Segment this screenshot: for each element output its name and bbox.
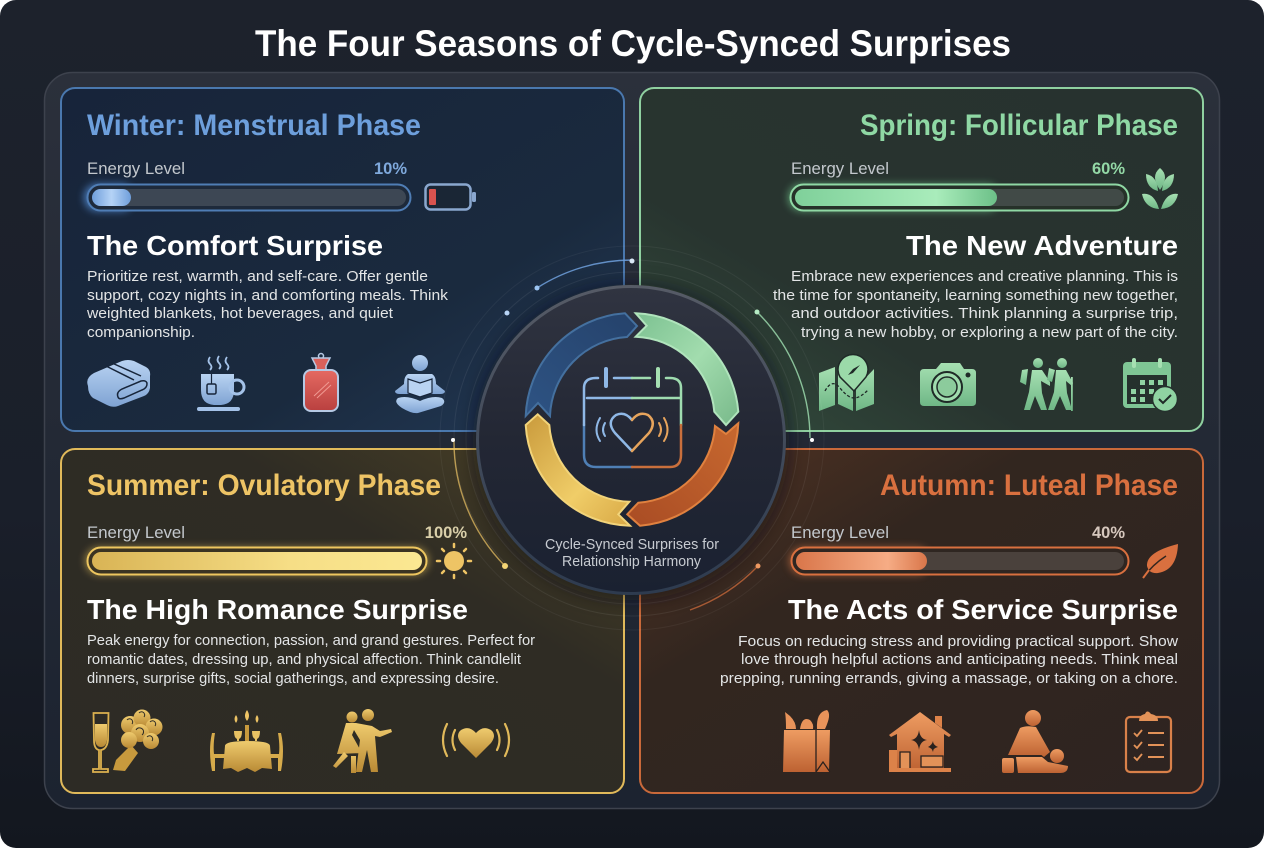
body text: spring: trying a new hobby, or exploring a new part of the city. [801, 324, 1178, 341]
body text: winter: companionship. [87, 324, 195, 341]
energy value: summer: 100% [425, 524, 467, 542]
body text: winter: weighted blankets, hot beverages, and quiet [86, 305, 394, 322]
icon: heart with waves [443, 724, 509, 758]
icon: map with compass [819, 355, 874, 411]
arrow: autumn segment [627, 423, 738, 526]
arrow: winter segment [526, 313, 637, 416]
body text: spring: Embrace new experiences and creative planning. This is [791, 268, 1178, 285]
energy bar: autumn [789, 547, 1128, 575]
subheading: summer: The High Romance Surprise [87, 594, 468, 625]
body text: summer [87, 632, 535, 687]
caption: Cycle-Synced Surprises for [545, 537, 719, 553]
caption [545, 537, 719, 570]
icon: sprout [1142, 168, 1178, 209]
energy bar: winter [84, 184, 410, 211]
body text: winter [86, 268, 448, 341]
title: The Four Seasons of Cycle-Synced Surprises [255, 23, 1011, 64]
icon: camera [920, 363, 976, 406]
energy label: winter: Energy Level [87, 159, 185, 178]
panel: winter [61, 88, 624, 431]
icon: clipboard checklist [1126, 712, 1171, 772]
icon: champagne and bouquet [93, 710, 162, 772]
icon: calendar with check [1123, 358, 1178, 412]
icon: hikers [1020, 358, 1073, 411]
subheading: autumn: The Acts of Service Surprise [788, 594, 1178, 625]
connector arcs and glowing dots [440, 246, 824, 630]
body text: autumn: Focus on reducing stress and providing practical support. Show [738, 633, 1178, 650]
heading: summer: Summer: Ovulatory Phase [87, 469, 441, 502]
heading: winter: Winter: Menstrual Phase [87, 109, 421, 142]
caption: Relationship Harmony [562, 554, 702, 570]
icon: grocery bag [783, 710, 830, 772]
body text: spring [773, 268, 1178, 341]
panel: autumn [640, 449, 1203, 793]
arrow: summer segment [526, 414, 630, 526]
icon: tea cup [197, 356, 244, 411]
body text: summer: dinners, surprise gifts, social gatherings, and expressing desire. [87, 670, 499, 687]
body text: spring: the time for spontaneity, learning something new together, [773, 287, 1178, 304]
icon: battery [426, 184, 476, 210]
panel: spring [640, 88, 1203, 431]
icon: clean house [889, 712, 951, 772]
energy label: spring: Energy Level [791, 159, 889, 178]
energy value: winter: 10% [374, 160, 407, 178]
body text: spring: and outdoor activities. Think planning a surprise trip, [791, 305, 1178, 322]
icon: calendar with heart [584, 369, 681, 467]
icon: massage [1002, 710, 1068, 773]
arrow: spring segment [636, 313, 738, 425]
icon: meditating reader [395, 355, 445, 413]
energy value: spring: 60% [1092, 160, 1125, 178]
energy label: summer: Energy Level [87, 523, 185, 542]
icon: dancing couple [333, 709, 392, 773]
heading: autumn: Autumn: Luteal Phase [880, 469, 1178, 502]
body text: autumn: love through helpful actions and anticipating needs. Think meal [741, 651, 1178, 668]
body text: autumn [720, 633, 1178, 687]
body text: summer: romantic dates, dressing up, and physical affection. Think candlelit [87, 651, 522, 668]
subheading: winter: The Comfort Surprise [87, 230, 383, 261]
energy bar: spring [788, 184, 1128, 211]
body text: autumn: prepping, running errands, giving a massage, or taking on a chore. [720, 670, 1178, 687]
icon: blanket [87, 360, 150, 407]
icon: candlelit dinner [210, 710, 283, 772]
energy value: autumn: 40% [1092, 524, 1125, 542]
icon: hot water bottle [304, 354, 338, 411]
heading: spring: Spring: Follicular Phase [860, 109, 1178, 142]
body text: winter: support, cozy nights in, and comforting meals. Think [87, 287, 448, 304]
panel: summer [61, 449, 624, 793]
body text: summer: Peak energy for connection, passion, and grand gestures. Perfect for [87, 632, 535, 649]
subheading: spring: The New Adventure [906, 230, 1178, 261]
icon: sun [437, 544, 471, 578]
icon: leaf [1143, 544, 1178, 578]
central hub [473, 284, 789, 600]
energy label: autumn: Energy Level [791, 523, 889, 542]
energy bar: summer [85, 547, 429, 575]
body text: winter: Prioritize rest, warmth, and self-care. Offer gentle [87, 268, 428, 285]
